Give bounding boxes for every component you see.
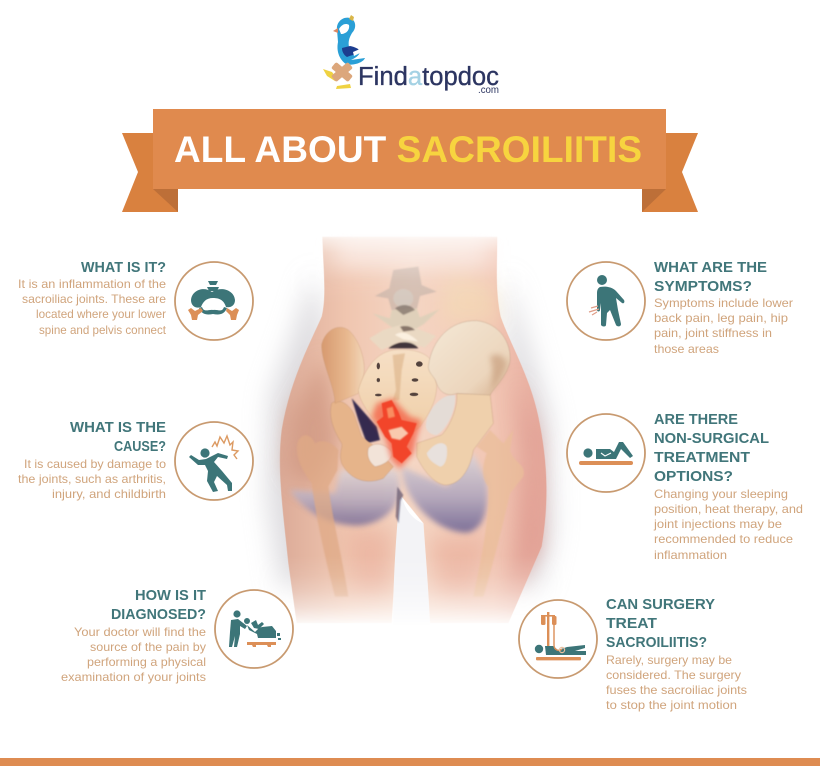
text block: injury, and childbirth: [52, 487, 166, 501]
banner panel: [153, 109, 666, 189]
title banner: [122, 109, 698, 212]
inflamed sacroiliac area: [372, 398, 422, 468]
text block: fuses the sacroiliac joints: [606, 683, 747, 697]
right ilium: [428, 321, 510, 395]
logo wordmark: Findatopdoc: [358, 63, 499, 91]
title text: ALL ABOUT SACROILIITIS: [174, 129, 642, 170]
heading: WHAT IS THE: [70, 419, 166, 436]
panel: how is it diagnosed: [61, 587, 293, 684]
dark cavity: [352, 398, 380, 443]
heading: [654, 411, 769, 485]
text block: those areas: [654, 342, 719, 356]
footer bar: [0, 758, 820, 766]
spine: [369, 267, 439, 350]
text block: spine and pelvis connect: [39, 323, 167, 337]
gap between legs: [394, 497, 429, 606]
anatomical illustration: pelvis and hips: [267, 233, 553, 627]
text block: [653, 487, 803, 562]
heading: [606, 596, 715, 651]
panel: non-surgical treatment options: [567, 411, 803, 562]
text block: position, heat therapy, and: [654, 502, 803, 516]
text block: [18, 277, 167, 337]
text block: joint injections may be: [653, 517, 782, 531]
icon: duck mascot: [323, 15, 365, 89]
text block: [61, 625, 206, 684]
panel: can surgery treat sacroiliitis: [519, 596, 747, 712]
gluteal shading right: [402, 453, 487, 533]
ribbon folds: [153, 189, 666, 212]
panel: what is it: [18, 259, 253, 340]
femurs: [297, 430, 524, 597]
icon: person lying on mat: [567, 414, 645, 492]
left ilium: [322, 327, 364, 403]
icon: person falling: [175, 422, 253, 500]
sacral foramina: [375, 361, 423, 396]
icon: person with hip pain: [567, 262, 645, 340]
text block: [654, 296, 793, 356]
heading: TREATMENT: [654, 449, 750, 466]
text block: the joints, such as arthritis,: [18, 472, 166, 486]
text block: source of the pain by: [90, 640, 206, 654]
ischium and pubic bones: [331, 393, 493, 485]
heading: OPTIONS?: [654, 468, 733, 485]
gluteal shading left: [290, 470, 400, 525]
icon: doctor examining patient: [215, 590, 293, 668]
logo: Findatopdoc: [323, 15, 499, 96]
heading: [654, 259, 767, 295]
ribbon tail left: [122, 133, 178, 212]
sacrum: [359, 350, 437, 431]
body silhouette: [280, 237, 546, 623]
icon: surgery with IV drip: [519, 600, 597, 678]
panel: what is the cause: [18, 419, 253, 501]
text block: Your doctor will find the: [74, 625, 206, 639]
text block: It is an inflammation of the: [18, 277, 166, 291]
heading: HOW IS IT: [135, 587, 206, 604]
heading: SACROILIITIS?: [606, 634, 707, 651]
heading: WHAT ARE THE: [654, 259, 767, 276]
text block: to stop the joint motion: [606, 698, 737, 712]
text block: located where your lower: [36, 307, 166, 321]
text block: performing a physical: [87, 655, 206, 669]
heading: ARE THERE: [654, 411, 738, 428]
text block: back pain, leg pain, hip: [654, 311, 788, 325]
heading: NON-SURGICAL: [654, 430, 769, 447]
text block: Changing your sleeping: [654, 487, 788, 501]
text block: sacroiliac joints. These are: [22, 292, 166, 306]
text block: considered. The surgery: [606, 668, 741, 682]
text block: [606, 653, 747, 712]
soft shadow around the body: [267, 270, 553, 590]
heading: CAUSE?: [114, 438, 166, 455]
text block: inflammation: [654, 548, 727, 562]
heading: WHAT IS IT?: [81, 259, 166, 276]
heading: CAN SURGERY: [606, 596, 715, 613]
icon: pelvis: [175, 262, 253, 340]
logo .com: .com: [478, 85, 499, 96]
heading: [111, 587, 206, 623]
text block: Symptoms include lower: [654, 296, 793, 310]
text block: Rarely, surgery may be: [606, 653, 732, 667]
text block: [18, 457, 166, 501]
panel: what are the symptoms: [567, 259, 793, 356]
text block: pain, joint stiffness in: [654, 326, 772, 340]
text block: It is caused by damage to: [24, 457, 166, 471]
skin shading: [287, 233, 540, 597]
heading: DIAGNOSED?: [111, 606, 206, 623]
heading: TREAT: [606, 615, 657, 632]
text block: recommended to reduce: [654, 532, 793, 546]
text block: examination of your joints: [61, 670, 206, 684]
heading: [70, 419, 166, 455]
heading: SYMPTOMS?: [654, 278, 752, 295]
ribbon tail right: [642, 133, 698, 212]
